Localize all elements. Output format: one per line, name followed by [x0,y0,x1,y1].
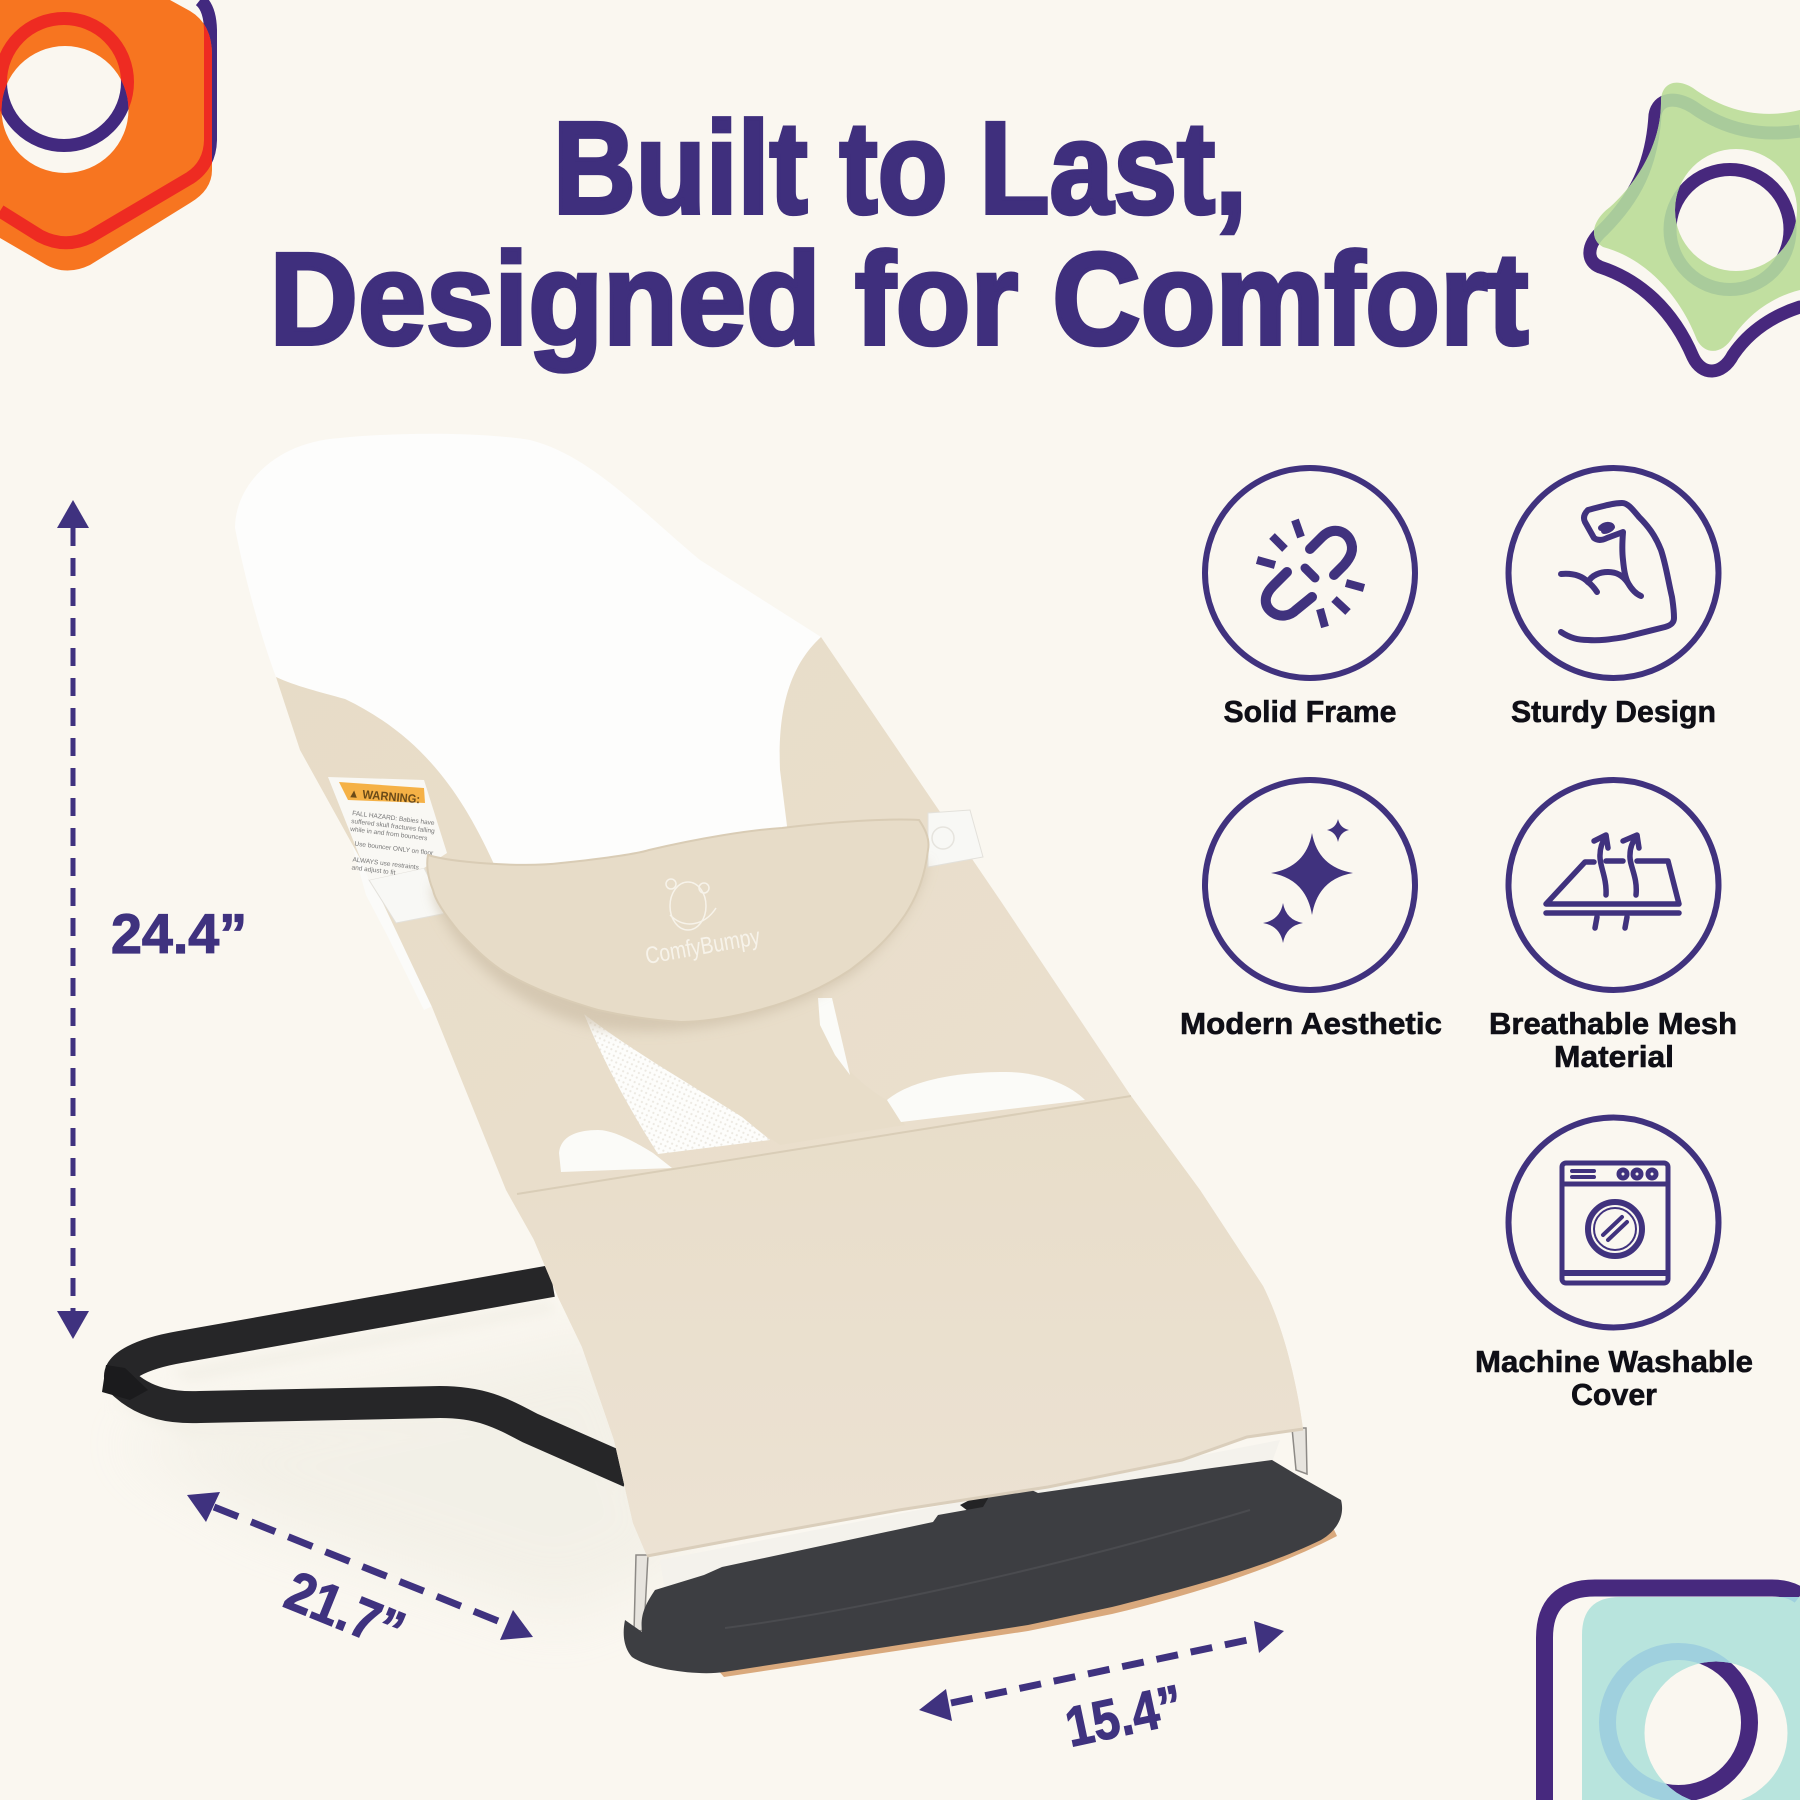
under seat chrome [660,1440,1280,1592]
right strap [928,810,983,867]
arrow head down [57,1311,89,1339]
bear logo [666,879,716,930]
footrest [624,1460,1342,1673]
feature: sturdy design [1508,468,1718,729]
arrow head up [57,500,89,528]
label [1475,1344,1753,1412]
label [1489,1006,1737,1074]
centre strap [584,993,905,1145]
icon: washing machine [1508,1118,1718,1328]
warning label: FALL HAZARD: Babies have [352,810,435,827]
warning label: ALWAYS use restraints [352,856,420,872]
dimension: height 24.4 [57,500,89,1312]
seat fabric [276,637,1303,1556]
label: Material [1554,1039,1674,1074]
decorative shape: orange hexagon [0,0,212,271]
icon: flexed arm [1508,468,1718,678]
metal frame tube [120,1281,630,1472]
icon: mesh with airflow arrows [1508,780,1718,990]
arrow head right [1254,1621,1284,1653]
label: Sturdy Design [1511,694,1716,729]
label: Breathable Mesh [1489,1006,1737,1041]
feature: modern aesthetic [1180,780,1442,1041]
dimension: width 15.4 [919,1638,1257,1721]
label: 24.4: 24.4” [111,902,247,965]
label: 21.7: 21.7” [277,1558,414,1663]
dimension: depth 21.7 [187,1492,503,1623]
feature: solid frame [1205,468,1415,729]
icon: broken link [1205,468,1415,678]
label: Machine Washable [1475,1344,1753,1379]
warning label: and adjust to fit [351,864,396,877]
warning label: Use bouncer ONLY on floor [354,841,434,857]
brand name: ComfyBumpy [643,923,762,970]
title [270,94,1528,372]
left strap [369,868,447,923]
mesh headrest [235,434,821,880]
frame foot [102,1365,148,1400]
feature: machine washable cover [1475,1118,1753,1412]
feature: breathable mesh material [1489,780,1737,1074]
title: Built to Last, [553,94,1247,241]
head pillow [427,819,929,1022]
label: Cover [1571,1377,1657,1412]
pocket panel [517,1096,1303,1556]
mesh seat panels [559,998,1085,1172]
arrow head right [500,1610,533,1640]
title: Designed for Comfort [270,225,1528,372]
label: Solid Frame [1224,694,1396,729]
warning label: while in and from bouncers [349,826,429,842]
arrow head left [919,1689,952,1721]
chrome bars [634,1428,1307,1632]
label: 15.4: 15.4” [1060,1672,1188,1759]
arrow head left [187,1492,220,1522]
decorative shape: green star [1590,83,1800,371]
label: Modern Aesthetic [1180,1006,1442,1041]
warning label: suffered skull fractures falling [351,818,435,835]
floor shadow [110,1300,700,1620]
decorative shape: teal square [1544,1588,1800,1800]
product photo: baby bouncer [102,434,1342,1677]
footrest wood base [700,1500,1337,1677]
warning label [328,777,447,881]
pillow shadow [433,860,928,1031]
side mesh strip [352,845,445,1010]
icon: sparkles [1205,780,1415,990]
warning label: ▲ WARNING: [348,786,421,806]
